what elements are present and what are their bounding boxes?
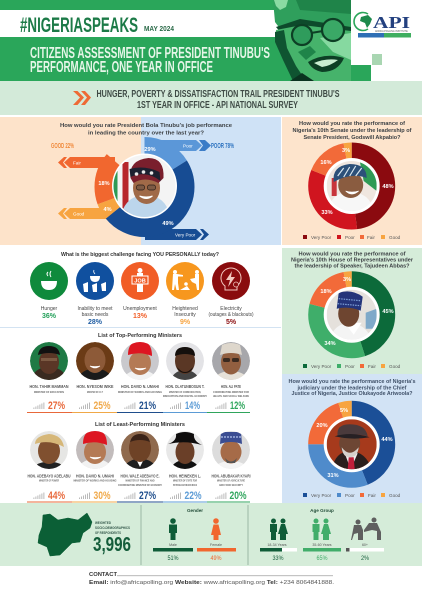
minister: Adebayo Adelabu [28, 431, 71, 502]
legend [303, 493, 401, 498]
question: Justice of Nigeria, Justice Olukayode Ariwoola? [292, 391, 413, 397]
question: Nigeria's 10th House of Representatives under [291, 258, 414, 264]
minister: Heineken L.: 22% [184, 490, 202, 502]
minister: Ali Pate [212, 342, 250, 412]
minister: Ali Pate: HEALTH AND SOCIAL WELFARE [213, 394, 249, 398]
panel: respondent demographics [0, 503, 422, 566]
legend [303, 235, 401, 240]
question: How would you rate the performance of [299, 121, 405, 127]
question: the leadership of Speaker, Tajudeen Abbas? [294, 264, 410, 270]
question: How would you rate the performance of Nigeria's [288, 379, 416, 385]
question [292, 121, 412, 141]
label: electricity: 5% [226, 319, 237, 326]
icon: job seeker: JOB [134, 278, 146, 284]
question: Nigeria's 10th Senate under the leadership of [292, 128, 412, 134]
minister: Tahir Mamman [30, 342, 69, 412]
panel: top-performing ministers [27, 333, 250, 413]
legend: Very Poor [311, 493, 332, 498]
gender breakdown: 51% [168, 555, 179, 562]
panel: senate rating [282, 117, 422, 245]
gender breakdown: Male [169, 543, 177, 547]
summary labels: POOR 78% [211, 143, 234, 150]
minister: Abubakar Kyari: 20% [230, 490, 247, 502]
icon: 18-34 couple [270, 518, 288, 540]
main title: PERFORMANCE, ONE YEAR IN OFFICE [30, 59, 213, 76]
minister: David N. Umahi repeat: 30% [94, 490, 111, 502]
panel: biggest personal challenge [0, 252, 281, 328]
minister: Nyesom Wike [76, 342, 114, 412]
legend: Good [389, 493, 401, 498]
ribbon: good [64, 208, 115, 219]
photo: Abbas [324, 287, 380, 343]
minister: Nyesom Wike: MINISTER OF F.C.T [87, 390, 103, 394]
age group breakdown [260, 508, 384, 562]
values: 44% [381, 437, 393, 443]
panel: judiciary rating [282, 374, 422, 503]
ribbon: fair [64, 157, 115, 168]
icon: electricity bulb [212, 262, 250, 300]
legend: Fair [368, 364, 376, 369]
minister: David N. Umahi [118, 341, 162, 412]
panel: president job performance [0, 117, 281, 245]
minister: Olatunbosun T.: 14% [185, 400, 200, 412]
minister: Tahir Mamman: MINISTER OF EDUCATION [34, 390, 64, 394]
label: insecurity: Heightened [172, 306, 198, 312]
panel: president job performance: Fair [73, 160, 81, 166]
label: insecurity: 9% [180, 319, 191, 326]
map of Nigeria [38, 513, 92, 556]
minister: David N. Umahi: HON. DAVID N. UMAHI [121, 384, 159, 389]
donut chart [316, 409, 387, 480]
label: unemployment [123, 306, 157, 320]
icon: hands and bowl [76, 262, 114, 300]
logo: Africa Polling Institute [354, 12, 411, 38]
minister: Olatunbosun T.: HON. OLATUNBOSUN T. [166, 384, 204, 389]
header portrait of President Tinubu [273, 0, 351, 81]
label: electricity: Electricity [220, 306, 242, 312]
panel: judiciary rating: 5% [340, 408, 348, 414]
label: inability: 28% [88, 319, 103, 326]
sample label: OF RESPONDENTS [95, 530, 121, 535]
decorative squares [351, 65, 371, 81]
label: unemployment: Unemployment [123, 306, 157, 312]
light green square [372, 54, 382, 65]
minister: Tahir Mamman: HON. TAHIR MAMMAN [30, 384, 69, 389]
icon: male [169, 518, 177, 540]
minister: David N. Umahi: 21% [139, 400, 156, 412]
icon: elderly couple [351, 518, 381, 540]
donut values: 29% [144, 147, 156, 153]
label: hunger [41, 306, 58, 320]
icon: 35-60 couple [312, 518, 331, 540]
minister: Olatunbosun T. [163, 342, 207, 412]
campaign hashtag: #NIGERIASPEAKS [20, 14, 138, 37]
legend: Very Poor [311, 364, 332, 369]
ribbon labels: Poor [183, 144, 193, 148]
panel: president job performance: Good [73, 212, 85, 216]
minister: David N. Umahi: MINISTER OF WORKS AND HOUSING [118, 390, 162, 394]
age group breakdown: 2% [361, 555, 369, 562]
main title: CITIZENS ASSESSMENT OF PRESIDENT TINUBU'S [30, 45, 270, 62]
colour rule [27, 502, 250, 503]
contact footer [89, 572, 335, 586]
age group breakdown: 35-60 Years [312, 543, 332, 547]
label: insecurity: Insecurity [174, 312, 196, 318]
sample label: SOCIO-DEMOGRAPHICS [95, 525, 130, 530]
subtitle text [96, 88, 340, 111]
panel: house of representatives rating: 34% [324, 341, 336, 347]
panel: house of representatives rating: 3% [343, 277, 351, 283]
label: electricity: (outages & blackouts) [208, 312, 254, 318]
minister: Adebayo Adelabu: MINISTER OF POWER [39, 478, 59, 482]
minister: Heineken L.: PETROLEUM RESOURCES [173, 483, 197, 487]
minister: Tahir Mamman: 27% [48, 400, 65, 412]
label: hunger: 36% [42, 313, 57, 320]
photo: Tinubu [112, 154, 177, 218]
gender breakdown: Gender [187, 508, 203, 513]
question: How would you rate the performance of [298, 252, 406, 258]
minister: Heineken L.: HON. HEINEKEN L. [169, 474, 201, 478]
main title [30, 45, 270, 76]
legend: Fair [367, 235, 375, 240]
minister: Abubakar Kyari: AND FOOD SECURITY [219, 483, 243, 487]
icon: female [211, 518, 221, 540]
sample label: WEIGHTED [95, 520, 111, 525]
donut chart [316, 150, 387, 222]
label: inability: Inability to meet [77, 306, 113, 312]
minister: David N. Umahi repeat: HON. DAVID N. UMAHI [76, 474, 114, 478]
age group breakdown: 60+ [362, 543, 368, 547]
logo: Africa Polling Institute: API [373, 13, 410, 32]
minister: Abubakar Kyari [212, 431, 250, 502]
label: hunger: Hunger [41, 306, 58, 312]
minister: Wale Adebayo E.: HON. WALE ADEBAYO E. [120, 474, 160, 478]
question [288, 379, 416, 397]
donut chart [104, 147, 184, 227]
subtitle band [0, 81, 422, 115]
panel: president job performance: 4% [103, 207, 112, 213]
legend: Poor [345, 364, 355, 369]
minister: Ali Pate: 12% [230, 400, 245, 412]
heading: What is the biggest challenge facing YOU PERSONALLY today? [61, 252, 220, 258]
label: insecurity [172, 306, 198, 326]
icon: orange chevrons [73, 91, 91, 105]
panel: judiciary rating: 31% [327, 473, 339, 479]
minister: Ali Pate: HON. ALI PATE [221, 384, 241, 389]
legend: Poor [345, 235, 355, 240]
age group breakdown: 18-34 Years [267, 543, 287, 547]
minister: Adebayo Adelabu: 44% [48, 490, 65, 502]
minister: Nyesom Wike: HON. NYESOM WIKE [76, 384, 114, 389]
panel: judiciary rating: 20% [316, 423, 328, 429]
minister: Wale Adebayo E. [118, 431, 162, 502]
legend: Very Poor [311, 235, 332, 240]
sample size: 3,996 [93, 534, 131, 556]
logo: Africa Polling Institute: AFRICA POLLING INSTITUTE [375, 30, 408, 33]
question: Senate President, Godswill Akpabio? [304, 135, 401, 141]
minister: Wale Adebayo E.: MINISTER OF FINANCE AND [126, 478, 155, 482]
panel: president job performance: 18% [98, 181, 110, 187]
age group breakdown: Age Group [310, 508, 334, 513]
photo: Akpabio [324, 158, 380, 214]
legend: Good [389, 364, 401, 369]
minister: Ali Pate: COORDINATING MINISTER FOR [213, 390, 249, 394]
minister: Nyesom Wike: 25% [94, 400, 111, 412]
donut chart [316, 279, 387, 350]
question: judiciary under the leadership of the Chief [297, 386, 407, 392]
question [291, 252, 414, 270]
minister: Heineken L. [166, 431, 204, 502]
minister: Wale Adebayo E.: COORDINATING MINISTER OF ECONOMY [118, 483, 162, 487]
panel: president job performance: GOOD 22% [51, 143, 74, 150]
legend: Fair [368, 493, 376, 498]
minister: Abubakar Kyari: HON. ABUBAKAR KYARI [212, 474, 250, 478]
panel: house of representatives rating: 18% [320, 289, 332, 295]
minister: Abubakar Kyari: MINISTER OF AGRICULTURE [217, 478, 245, 482]
age group breakdown: 33% [272, 555, 284, 562]
legend: Good [389, 235, 401, 240]
icon: job seeker [121, 262, 159, 300]
heading: List of Top-Performing Ministers [98, 333, 182, 339]
gender breakdown: Female [210, 543, 222, 547]
question: in leading the country over the last year? [88, 130, 205, 136]
legend: Poor [345, 493, 355, 498]
panel: senate rating: 16% [320, 160, 332, 166]
heading: List of Least-Performing Ministers [95, 422, 185, 428]
sample label [95, 520, 130, 535]
minister: Adebayo Adelabu: HON. ADEBAYO ADELABU [28, 474, 71, 478]
photo: Ariwoola [324, 416, 380, 472]
minister: Heineken L.: MINISTER OF STATE FOR [173, 478, 197, 482]
colour rule [27, 412, 250, 413]
label: inability [77, 306, 113, 326]
values: 48% [382, 184, 394, 190]
panel: president job performance: 49% [162, 221, 174, 227]
minister: Wale Adebayo E.: 27% [139, 490, 156, 502]
date: MAY 2024 [144, 26, 174, 33]
panel: house of representatives rating [282, 248, 422, 374]
minister: David N. Umahi repeat [74, 430, 116, 502]
panel: senate rating: 3% [342, 148, 350, 154]
values: 45% [382, 309, 394, 315]
header banner [0, 0, 371, 81]
contact footer: Email: info@africapolling.org Website: www.africapolling.org Tel: +234 8064841888. [89, 580, 335, 586]
gender breakdown: 49% [210, 555, 222, 562]
icon: insecurity [166, 262, 204, 300]
minister: Olatunbosun T.: MINISTER OF COMMUNICATION, [169, 390, 201, 394]
panel: senate rating: 33% [321, 210, 333, 216]
age group breakdown: 65% [316, 555, 328, 562]
gender breakdown [153, 508, 236, 562]
legend [303, 364, 401, 369]
minister: David N. Umahi repeat: MINISTER OF WORKS AND HOUSING [74, 478, 116, 482]
panel: least-performing ministers [27, 422, 250, 502]
question: How would you rate President Bola Tinubu's job performance [60, 123, 232, 129]
contact footer: CONTACT [89, 572, 118, 578]
minister: Olatunbosun T.: INNOVATION AND DIGITAL ECONOMY [163, 394, 207, 398]
label: inability: basic needs [82, 312, 109, 318]
icon: hunger bowl [30, 262, 68, 300]
label: electricity [208, 306, 254, 326]
ribbon: poor [145, 140, 202, 151]
ribbon: very poor [145, 229, 202, 240]
panel: president job performance: Very Poor [175, 232, 196, 238]
question [60, 123, 232, 136]
label: unemployment: 13% [133, 313, 148, 320]
subtitle text: 1ST YEAR IN OFFICE - API NATIONAL SURVEY [137, 99, 298, 111]
